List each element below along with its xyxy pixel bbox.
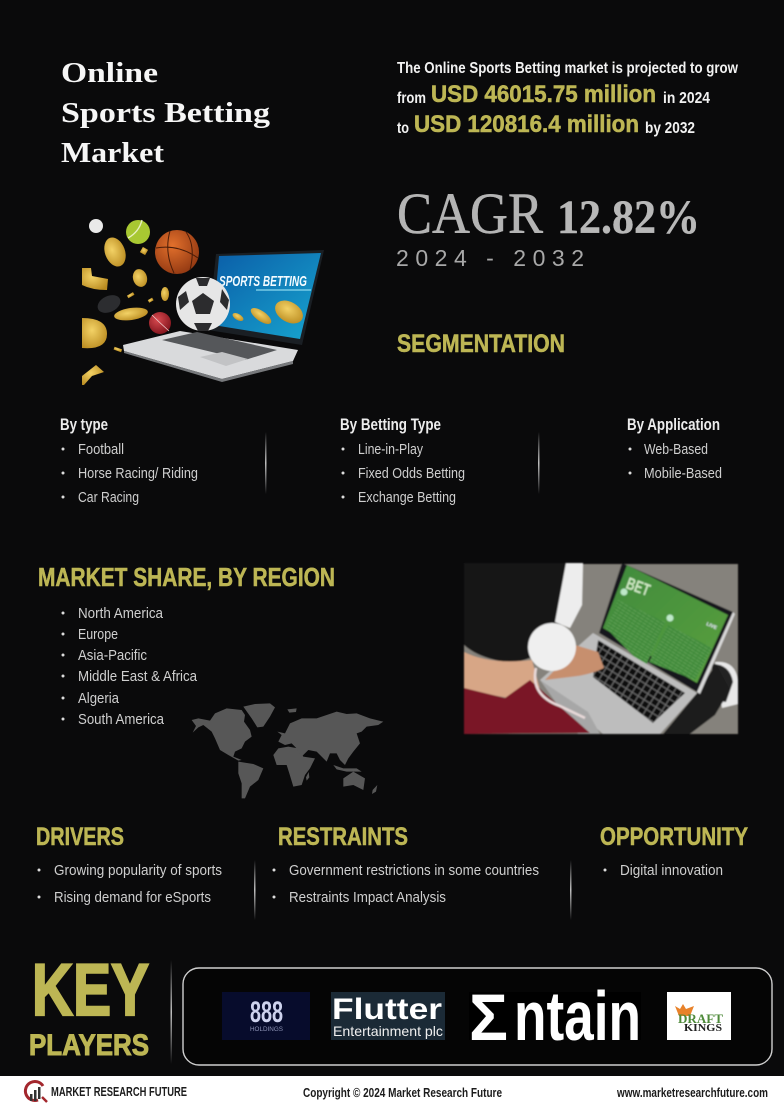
- photo: person betting on a laptop: [464, 563, 738, 734]
- footer: Copyright © 2024 Market Research Future: [303, 1086, 502, 1100]
- segment: by application: By Application: [627, 416, 720, 434]
- panel: key player logos: [183, 968, 772, 1065]
- CAGR figure: 2024 - 2032: [396, 245, 584, 271]
- segment: by type: Horse Racing/ Riding: [78, 465, 198, 482]
- segment: by type: Car Racing: [78, 489, 139, 506]
- laptop screen: [208, 250, 324, 345]
- logo: entain: [469, 977, 641, 1055]
- laptop base and keyboard: [540, 633, 697, 734]
- region list: [62, 605, 198, 728]
- hero illustration: laptop with sports balls and coins: [82, 219, 324, 385]
- logo: entain: ntain: [514, 977, 641, 1055]
- segment: by betting type: Line-in-Play: [358, 441, 423, 458]
- logo: 888 holdings: 888: [250, 996, 283, 1029]
- segment: by betting type: Exchange Betting: [358, 489, 456, 506]
- footer: [0, 1076, 784, 1108]
- icon: golf ball: [89, 219, 103, 233]
- heading: key players: KEY: [32, 950, 149, 1031]
- logo: flutter entertainment: Flutter: [332, 993, 442, 1026]
- region list: Algeria: [78, 690, 120, 707]
- logo: draftkings: KINGS: [684, 1023, 723, 1034]
- logo: 888 holdings: [222, 992, 310, 1040]
- panel: drivers: DRIVERS: [36, 823, 124, 851]
- laptop screen: BET: [624, 574, 653, 600]
- market projection text: USD 120816.4 million: [414, 111, 639, 138]
- hand: [545, 645, 604, 680]
- laptop screen: LIVE: [705, 621, 718, 632]
- segment: by application: Mobile-Based: [644, 465, 722, 482]
- segment: by betting type: [340, 416, 465, 506]
- CAGR figure: [396, 181, 700, 271]
- CAGR figure: 12.82%: [557, 191, 700, 244]
- segment: by betting type: Fixed Odds Betting: [358, 465, 465, 482]
- market projection text: [397, 60, 738, 138]
- logo: 888 holdings: HOLDINGS: [250, 1027, 283, 1033]
- market projection text: from: [397, 90, 426, 107]
- region list: North America: [78, 605, 164, 622]
- segment: by type: [60, 416, 198, 506]
- panel: restraints: RESTRAINTS: [278, 823, 408, 851]
- segment: by type: By type: [60, 416, 108, 434]
- neck and skin: [464, 652, 540, 700]
- panel: opportunity: [600, 823, 748, 879]
- CAGR figure: CAGR: [397, 181, 543, 246]
- panel: opportunity: OPPORTUNITY: [600, 823, 748, 851]
- laptop base: [123, 331, 298, 382]
- title: Online: [61, 57, 158, 89]
- region list: Asia-Pacific: [78, 647, 147, 664]
- icon: market research future logo: [25, 1082, 47, 1102]
- headphones: [528, 563, 585, 718]
- title: Sports Betting: [61, 97, 271, 129]
- region list: South America: [78, 711, 165, 728]
- icon: gold coins: [82, 234, 169, 385]
- hair: [464, 563, 568, 662]
- heading: segmentation: SEGMENTATION: [397, 330, 565, 358]
- region list: Europe: [78, 626, 118, 643]
- segment: by application: Web-Based: [644, 441, 708, 458]
- title: Market: [61, 137, 164, 169]
- heading: market share by region: MARKET SHARE, BY REGION: [38, 562, 335, 592]
- logo: draftkings: [667, 992, 731, 1040]
- logo: flutter entertainment: [331, 992, 445, 1040]
- heading: key players: [29, 950, 149, 1062]
- footer: MARKET RESEARCH FUTURE: [51, 1085, 187, 1099]
- panel: drivers: Rising demand for eSports: [54, 889, 211, 906]
- title: [61, 57, 271, 169]
- laptop screen: [599, 563, 735, 694]
- icon: hockey puck: [95, 292, 123, 316]
- region list: Middle East & Africa: [78, 668, 198, 685]
- segment: by betting type: By Betting Type: [340, 416, 441, 434]
- panel: drivers: [36, 823, 222, 906]
- market projection text: by 2032: [645, 120, 695, 137]
- panel: drivers: Growing popularity of sports: [54, 862, 222, 879]
- panel: restraints: Restraints Impact Analysis: [289, 889, 446, 906]
- icon: cricket ball: [149, 312, 171, 334]
- market projection text: in 2024: [663, 90, 710, 107]
- logo: entain: Σ: [469, 980, 508, 1054]
- segment: by application: [627, 416, 722, 482]
- shoe and trousers: [663, 662, 738, 734]
- panel: restraints: [272, 823, 539, 906]
- icon: soccer ball: [176, 277, 230, 331]
- heading: key players: PLAYERS: [29, 1029, 149, 1062]
- icon: tennis ball: [126, 220, 150, 244]
- panel: opportunity: Digital innovation: [620, 862, 723, 879]
- laptop screen: SPORTS BETTING: [219, 273, 307, 290]
- market projection text: to: [397, 120, 409, 137]
- logo: draftkings: DRAFT: [678, 1011, 723, 1026]
- segment: by type: Football: [78, 441, 124, 458]
- world map: [192, 703, 383, 798]
- panel: restraints: Government restrictions in some countries: [289, 862, 539, 879]
- red shirt: [464, 680, 590, 734]
- market projection text: USD 46015.75 million: [431, 81, 656, 108]
- icon: basketball: [155, 230, 199, 274]
- logo: flutter entertainment: Entertainment plc: [333, 1023, 443, 1039]
